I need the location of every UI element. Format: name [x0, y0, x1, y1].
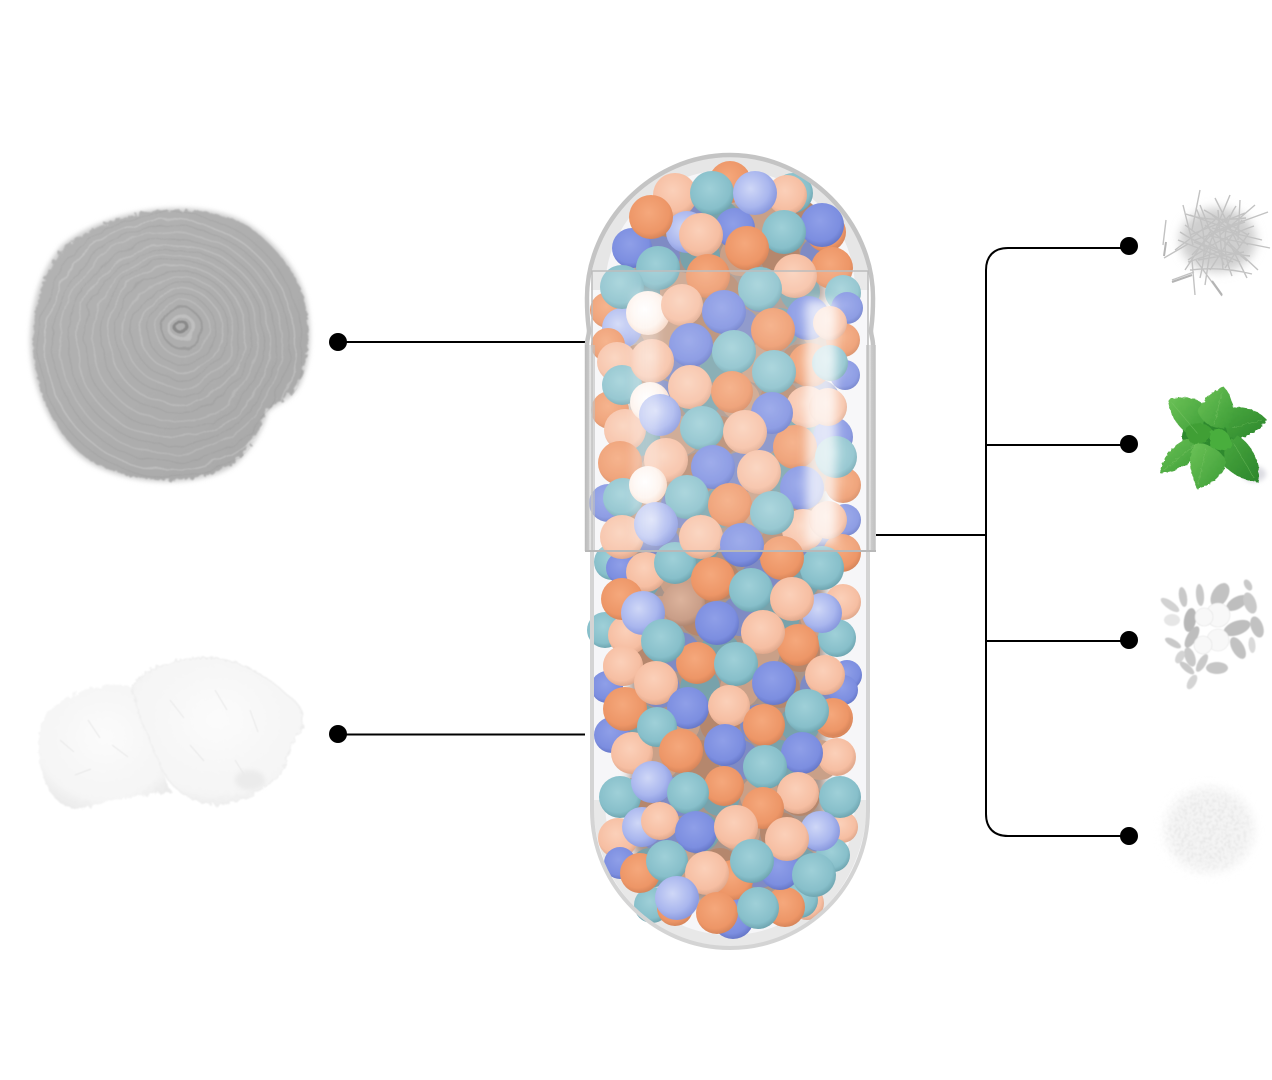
right cap: [132, 658, 303, 804]
icon: gray fibre bundle: [1163, 190, 1270, 296]
cap highlight right: [806, 300, 836, 545]
body shell: [592, 551, 868, 948]
base inner tone: [599, 800, 861, 941]
cap highlight left: [632, 290, 658, 545]
spheres: [587, 161, 863, 939]
mint backing: [1182, 415, 1242, 459]
filler spheres: [620, 200, 840, 888]
pile backing: [630, 200, 825, 905]
mint leaf center right: [1210, 429, 1232, 450]
mint leaf bottom: [1190, 443, 1226, 489]
cap tint: [592, 270, 868, 551]
infographic: capsule with ingredient connectors: [28, 152, 1270, 950]
capsule interior glass: [592, 156, 868, 948]
connector: turkey tail line: [329, 333, 585, 351]
mint leaf top: [1198, 387, 1233, 428]
cap edge band left: [585, 345, 595, 551]
mint shadow: [1242, 466, 1266, 482]
mint leaf lower-left: [1160, 437, 1200, 473]
connector tree: right ingredients: [876, 238, 1137, 844]
mint leaf center: [1186, 423, 1213, 444]
icon: white powder: [1166, 788, 1254, 872]
panel: turkey tail mushroom: [30, 208, 310, 482]
panel: lion's mane mushroom: [38, 658, 303, 808]
mint leaf top-left: [1168, 397, 1205, 438]
icon: mint sprig: [1160, 387, 1267, 489]
cap seam: [585, 550, 876, 552]
dome inner tone: [598, 163, 862, 290]
icon: bacopa sprig: [1159, 578, 1266, 691]
connector: lion's mane line: [329, 725, 585, 743]
cap shell: [587, 155, 873, 551]
left cap: [38, 685, 172, 808]
cap rim: [592, 271, 868, 551]
bacopa flowers: [1194, 603, 1230, 654]
cap edge band right: [866, 345, 876, 551]
mint leaf lower-right: [1224, 436, 1259, 482]
mint leaf right: [1226, 407, 1267, 438]
capsule: [585, 155, 876, 948]
